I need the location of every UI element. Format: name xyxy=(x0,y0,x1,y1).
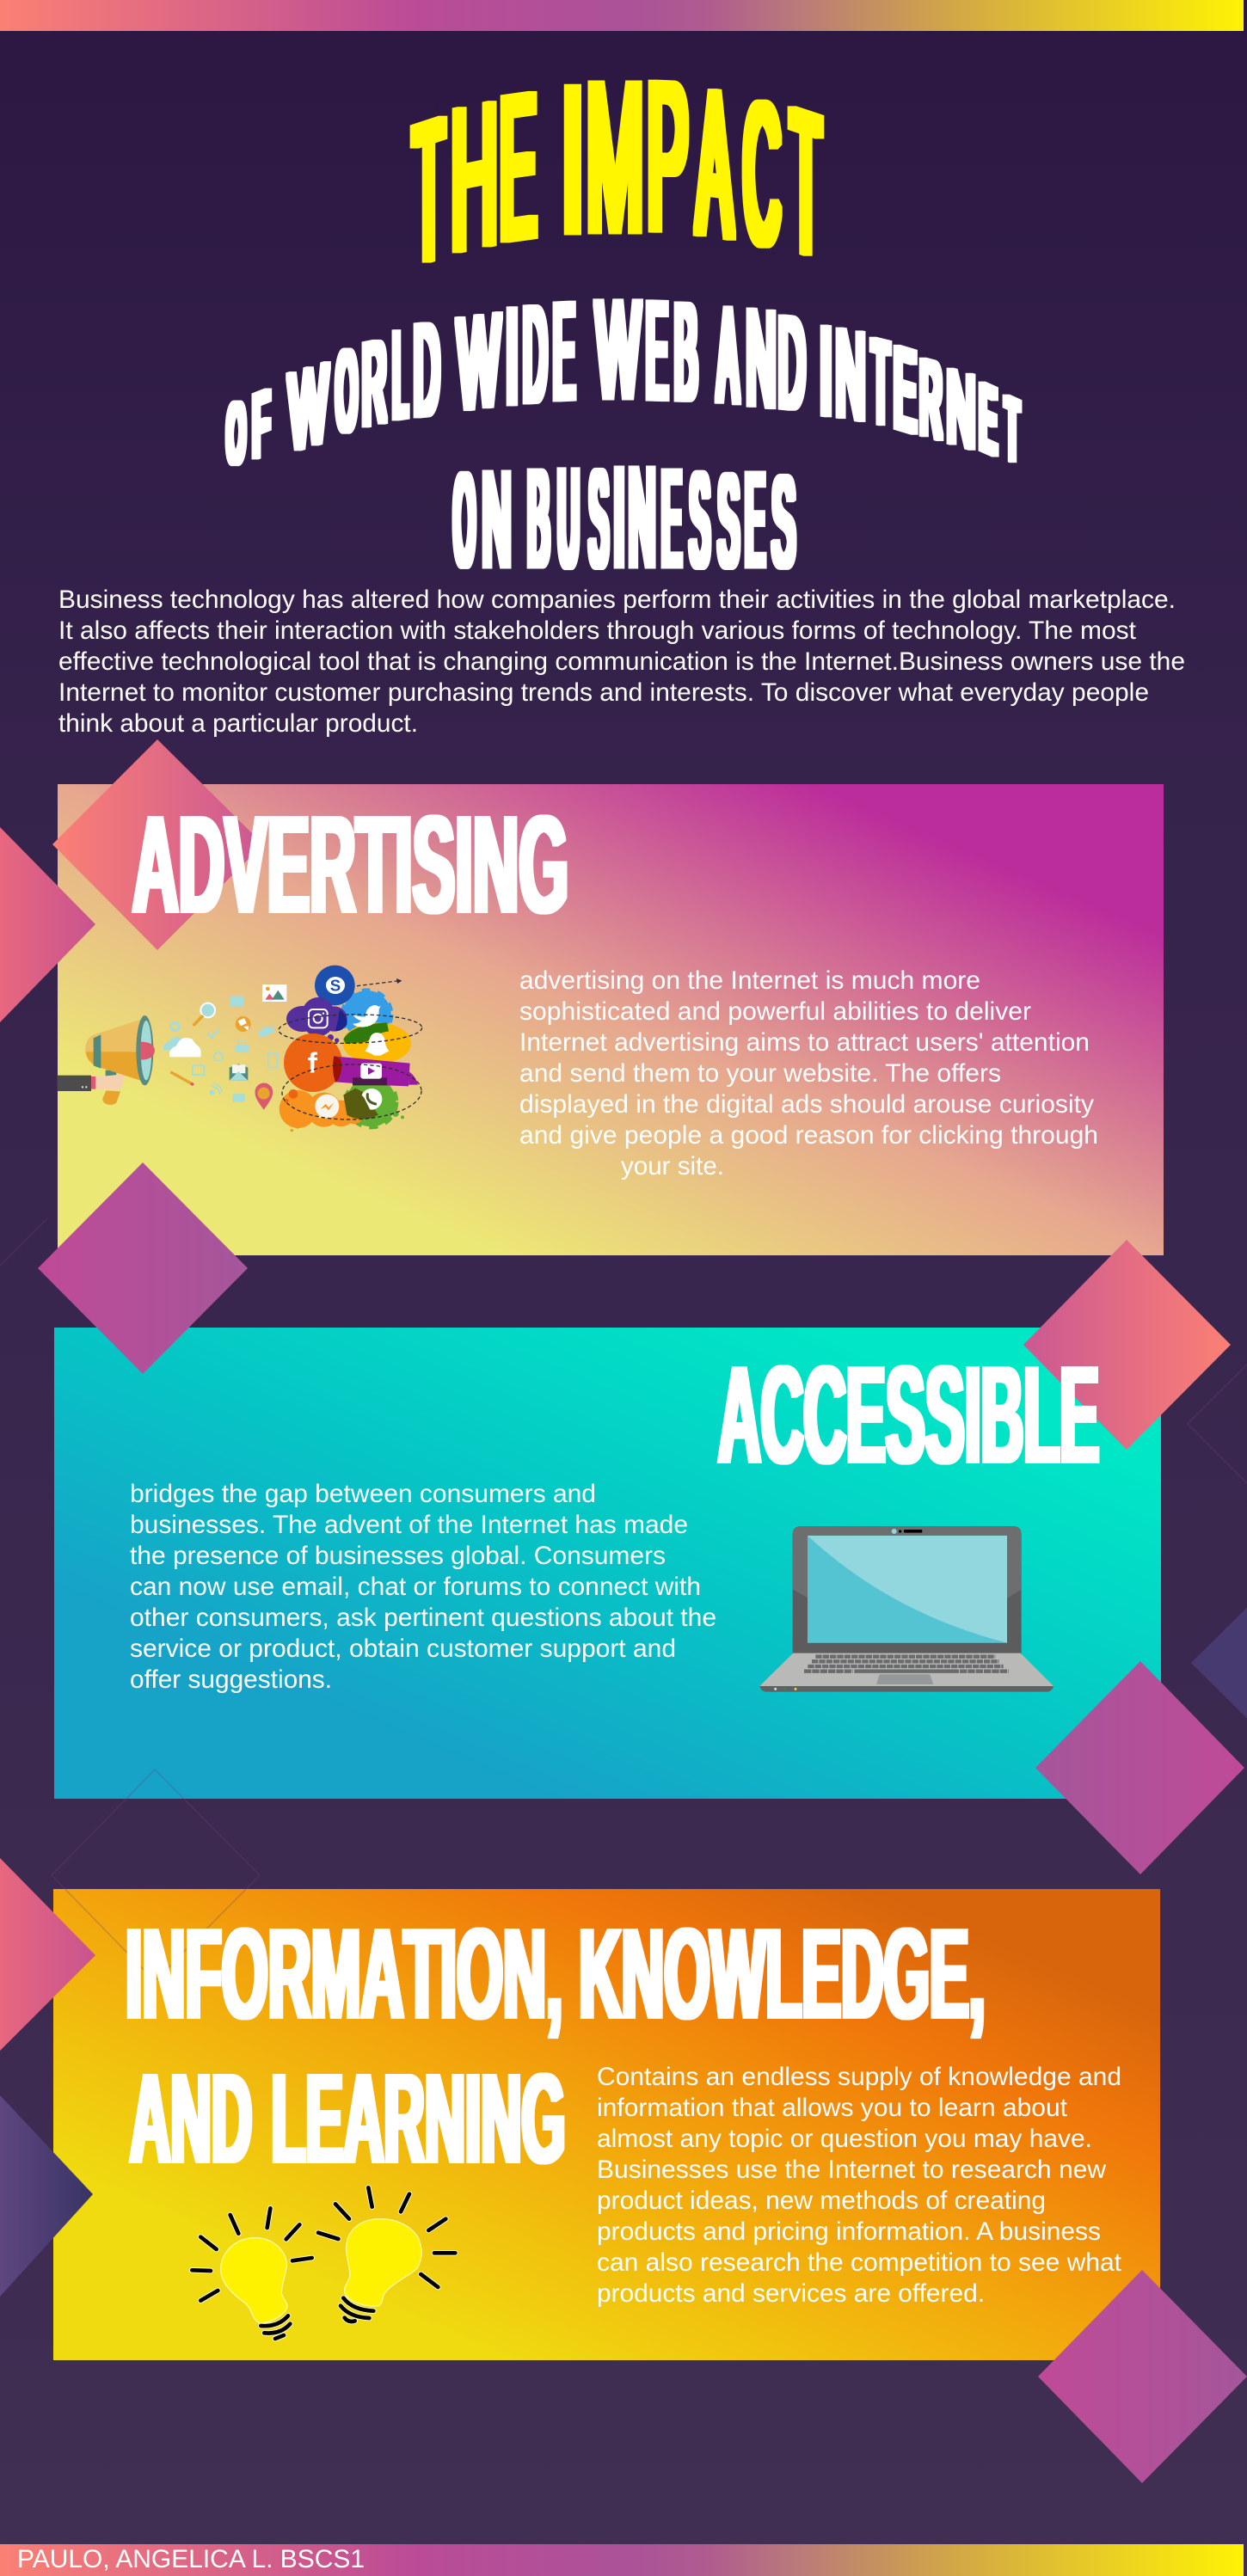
icon: snapchat xyxy=(343,1022,411,1064)
illustration: megaphone and social media icons xyxy=(58,966,422,1132)
title line: OF WORLD WIDE WEB AND INTERNET: D xyxy=(523,279,547,431)
title line: OF WORLD WIDE WEB AND INTERNET: E xyxy=(647,273,667,428)
icon: whatsapp xyxy=(344,1077,396,1126)
title line: OF WORLD WIDE WEB AND INTERNET: I xyxy=(819,301,833,442)
title line: OF WORLD WIDE WEB AND INTERNET: B xyxy=(674,276,697,429)
panel: advertising xyxy=(58,784,1164,1255)
text: information: Contains an endless supply of knowledge and xyxy=(597,2063,1121,2091)
icons: small marketing symbols xyxy=(163,984,286,1110)
background diamond outlines xyxy=(0,1218,1247,1981)
icon: facebook: f xyxy=(308,1047,318,1079)
title line: THE IMPACT: E xyxy=(501,52,537,284)
title line: THE IMPACT: C xyxy=(744,60,780,289)
title line: OF WORLD WIDE WEB AND INTERNET: E xyxy=(554,275,574,429)
intro paragraph: Business technology has altered how companies perform their activities in the global marketplace. xyxy=(58,586,1176,614)
text: accessible: offer suggestions. xyxy=(130,1665,332,1694)
text: advertising: sophisticated and powerful abilities to deliver xyxy=(519,997,1031,1026)
title line: OF WORLD WIDE WEB AND INTERNET xyxy=(227,273,1019,483)
icon: facebook xyxy=(284,1033,342,1092)
diamond: information left pink xyxy=(0,1858,95,2051)
keyboard xyxy=(804,1657,1009,1671)
author credit: PAULO, ANGELICA L. BSCS1 xyxy=(17,2545,365,2573)
icon: skype xyxy=(315,966,355,1005)
icon: messenger xyxy=(280,1089,404,1132)
heading: information, knowledge, and learning: INFORMATION, xyxy=(126,1902,562,2046)
title line: OF WORLD WIDE WEB AND INTERNET: L xyxy=(393,305,408,445)
title line: ON BUSINESSES: S xyxy=(718,449,739,593)
arrow head xyxy=(396,978,402,984)
diamond: advertising top left xyxy=(52,739,263,950)
text: information: information that allows you to learn about xyxy=(597,2094,1068,2122)
intro paragraph: Internet to monitor customer purchasing trends and interests. To discover what everyday people xyxy=(58,678,1149,707)
title line: ON BUSINESSES: U xyxy=(558,441,579,596)
title line: OF WORLD WIDE WEB AND INTERNET: D xyxy=(414,297,439,444)
diamond: left edge pink xyxy=(0,827,95,1022)
title line: ON BUSINESSES: S xyxy=(772,451,795,593)
title line: OF WORLD WIDE WEB AND INTERNET: W xyxy=(458,287,501,437)
diamond: information bottom right xyxy=(1038,2270,1247,2483)
title line: ON BUSINESSES: E xyxy=(746,446,765,594)
text: advertising xyxy=(519,966,1098,1181)
title line: ON BUSINESSES: I xyxy=(613,439,625,596)
diamond: right edge indigo xyxy=(1191,1558,1247,1768)
webcam xyxy=(892,1529,922,1534)
title line: OF WORLD WIDE WEB AND INTERNET: W xyxy=(596,273,641,427)
panel: accessible xyxy=(54,1328,1161,1799)
text: advertising: Internet advertising aims to attract users' attention xyxy=(519,1028,1090,1057)
title line: ON BUSINESSES: S xyxy=(589,444,608,595)
laptop screen xyxy=(808,1536,1007,1643)
text: information xyxy=(597,2063,1122,2308)
diamond: information left indigo xyxy=(0,2095,93,2297)
title line: ON BUSINESSES: B xyxy=(528,443,550,595)
title line: OF WORLD WIDE WEB AND INTERNET: O xyxy=(336,327,357,456)
title line: ON BUSINESSES: N xyxy=(482,445,511,595)
title line: OF WORLD WIDE WEB AND INTERNET: N xyxy=(746,282,776,436)
icon: twitter badge xyxy=(343,991,391,1039)
decorative diamonds xyxy=(0,739,1247,2483)
title line: ON BUSINESSES: E xyxy=(662,443,681,595)
text: accessible: bridges the gap between consumers and xyxy=(130,1480,596,1508)
intro paragraph xyxy=(58,586,1185,738)
text: accessible: the presence of businesses global. Consumers xyxy=(130,1542,666,1570)
text: information: Businesses use the Internet to research new xyxy=(597,2156,1106,2184)
title line: ON BUSINESSES: N xyxy=(629,439,655,596)
touchpad xyxy=(876,1674,933,1684)
heading: information, knowledge, and learning: AND xyxy=(130,2048,252,2191)
title line: THE IMPACT: A xyxy=(697,47,733,281)
title line: OF WORLD WIDE WEB AND INTERNET: D xyxy=(778,290,805,437)
text: accessible: can now use email, chat or forums to connect with xyxy=(130,1573,701,1601)
title line: THE IMPACT: M xyxy=(587,40,643,277)
top gradient bar xyxy=(0,0,1244,31)
text: advertising: advertising on the Internet is much more xyxy=(519,966,980,995)
title line: OF WORLD WIDE WEB AND INTERNET: A xyxy=(717,280,738,432)
illustration: laptop xyxy=(759,1526,1054,1692)
title line: THE IMPACT: I xyxy=(560,45,586,277)
text: information: products and pricing information. A business xyxy=(597,2217,1101,2246)
title line: OF WORLD WIDE WEB AND INTERNET: T xyxy=(872,316,889,450)
text: information: product ideas, new methods of creating xyxy=(597,2187,1046,2215)
icon: youtube xyxy=(333,1056,418,1086)
icon: skype: S xyxy=(330,977,341,995)
title line: OF WORLD WIDE WEB AND INTERNET: R xyxy=(920,338,942,461)
diamond: accessible top right xyxy=(1023,1240,1231,1450)
title line: OF WORLD WIDE WEB AND INTERNET: T xyxy=(1005,379,1019,481)
title line: OF WORLD WIDE WEB AND INTERNET: R xyxy=(362,316,386,451)
heading: information, knowledge, and learning: LEARNING xyxy=(271,2048,565,2191)
intro paragraph: think about a particular product. xyxy=(58,709,418,738)
icon: right light bulb xyxy=(318,2187,455,2321)
heading: accessible: ACCESSIBLE xyxy=(718,1338,1099,1493)
heading: information, knowledge, and learning: KNOWLEDGE, xyxy=(579,1902,986,2046)
dashed orbit paths xyxy=(279,981,422,1120)
title line: THE IMPACT: T xyxy=(790,68,821,299)
main title xyxy=(227,40,1019,596)
bottom gradient bar xyxy=(0,2544,1244,2576)
icon: megaphone xyxy=(58,1015,155,1105)
title line: THE IMPACT: H xyxy=(451,62,498,294)
title line: OF WORLD WIDE WEB AND INTERNET: N xyxy=(947,349,975,470)
status lights xyxy=(774,1688,796,1690)
icon: twitter bird xyxy=(352,1005,381,1027)
laptop base xyxy=(759,1653,1054,1686)
title line: THE IMPACT: T xyxy=(413,78,445,305)
title line: OF WORLD WIDE WEB AND INTERNET: N xyxy=(836,304,865,446)
heading: advertising: ADVERTISING xyxy=(132,788,568,942)
text: accessible: businesses. The advent of the Internet has made xyxy=(130,1511,688,1539)
text: advertising: and send them to your website. The offers xyxy=(519,1059,1001,1088)
text: information: almost any topic or question you may have. xyxy=(597,2125,1092,2153)
text: accessible xyxy=(130,1480,716,1694)
title line: THE IMPACT xyxy=(413,40,821,305)
title line: ON BUSINESSES: O xyxy=(454,449,475,593)
title line: OF WORLD WIDE WEB AND INTERNET: I xyxy=(505,281,519,432)
title line: ON BUSINESSES xyxy=(454,439,795,596)
illustration: light bulbs xyxy=(192,2187,455,2339)
text: advertising: your site. xyxy=(621,1152,724,1181)
icon: left light bulb xyxy=(192,2208,312,2339)
text: accessible: service or product, obtain customer support and xyxy=(130,1635,676,1663)
heading: information, knowledge, and learning xyxy=(126,1902,986,2191)
title line: OF WORLD WIDE WEB AND INTERNET: E xyxy=(980,365,997,475)
title line: OF WORLD WIDE WEB AND INTERNET: W xyxy=(289,341,328,474)
diamond: accessible bottom right xyxy=(1035,1661,1244,1874)
diamond: advertising bottom left xyxy=(38,1162,248,1374)
text: information: can also research the competition to see what xyxy=(597,2248,1122,2277)
text: accessible: other consumers, ask pertinent questions about the xyxy=(130,1604,716,1632)
icon: instagram xyxy=(286,997,347,1043)
title line: THE IMPACT: P xyxy=(648,40,688,276)
title line: OF WORLD WIDE WEB AND INTERNET: F xyxy=(253,373,269,476)
text: information: products and services are offered. xyxy=(597,2279,985,2308)
text: advertising: and give people a good reason for clicking through xyxy=(519,1121,1098,1150)
panel: information, knowledge and learning xyxy=(53,1889,1160,2360)
title line: OF WORLD WIDE WEB AND INTERNET: O xyxy=(227,383,245,483)
intro paragraph: It also affects their interaction with stakeholders through various forms of technology. The most xyxy=(58,616,1137,645)
title line: OF WORLD WIDE WEB AND INTERNET: E xyxy=(894,323,916,457)
text: advertising: displayed in the digital ads should arouse curiosity xyxy=(519,1090,1094,1119)
laptop lid xyxy=(793,1526,1022,1653)
title line: ON BUSINESSES: S xyxy=(690,447,710,594)
intro paragraph: effective technological tool that is changing communication is the Internet.Business owners use the xyxy=(58,647,1185,676)
